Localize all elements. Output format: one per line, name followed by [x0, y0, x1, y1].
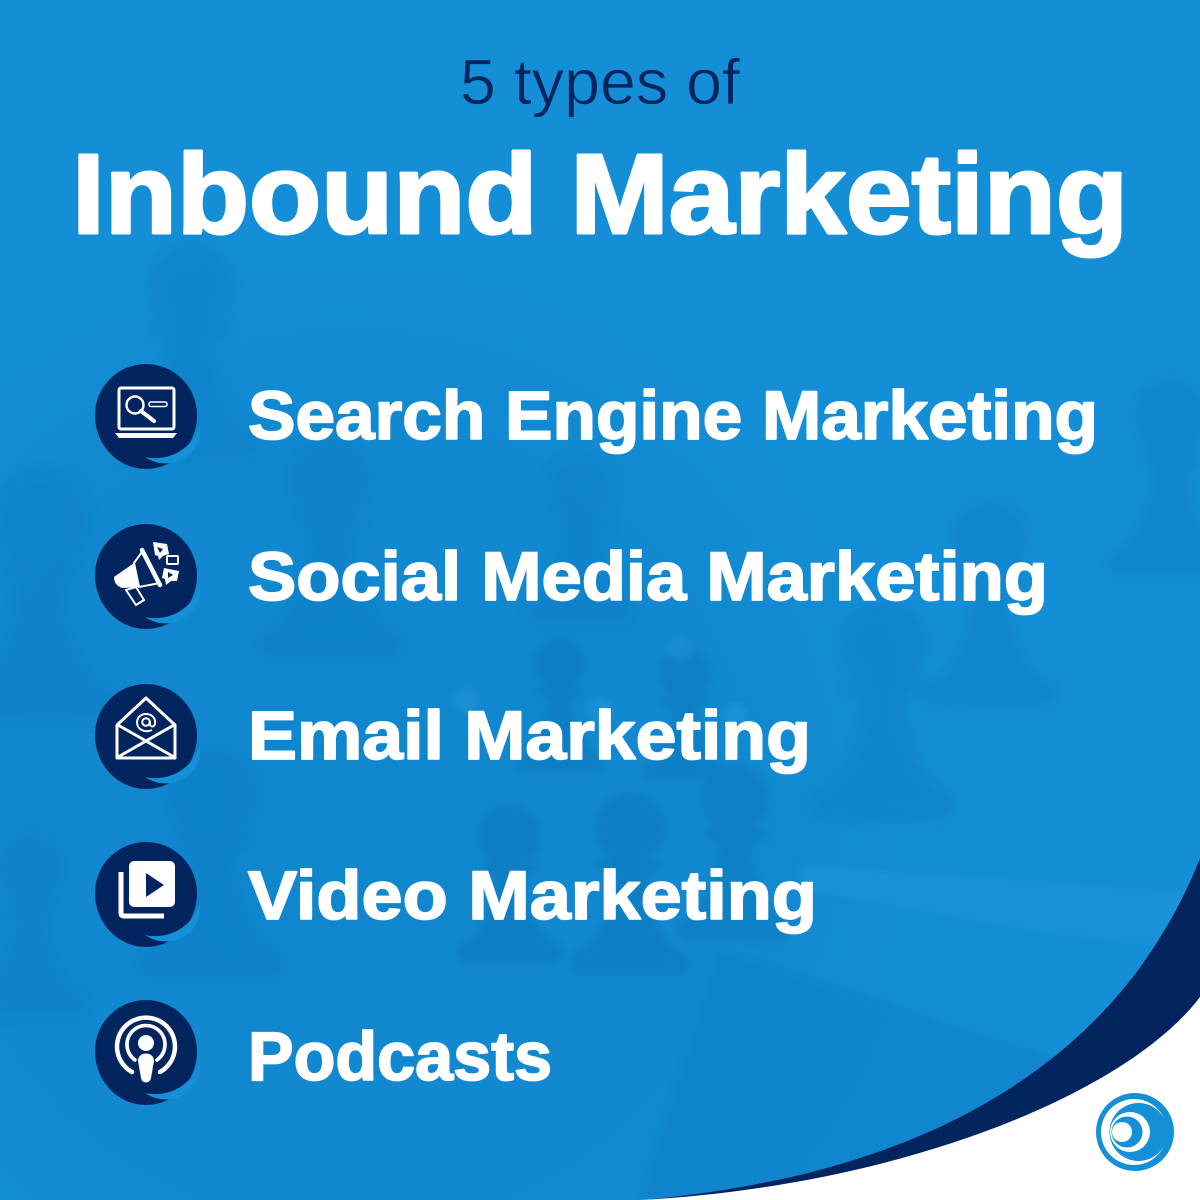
subtitle: 5 types of: [460, 46, 740, 118]
item: Social Media Marketing: [95, 524, 1048, 629]
navy curved corner band: [640, 858, 1200, 1200]
item: Email Marketing: [95, 684, 811, 789]
item: Podcasts: [95, 1000, 552, 1105]
icon: megaphone: [95, 524, 200, 629]
icon: podcast: [95, 1000, 200, 1105]
label: Search Engine Marketing: [248, 377, 1098, 454]
label: Video Marketing: [248, 857, 817, 934]
icon: video playlist: [95, 842, 200, 947]
item: Search Engine Marketing: [95, 364, 1098, 469]
title: Inbound Marketing: [72, 131, 1128, 257]
logo: concentric swirl: [1096, 1093, 1174, 1171]
icon: open envelope: [95, 684, 200, 789]
white corner: [640, 997, 1200, 1200]
label: Podcasts: [248, 1018, 552, 1095]
item: Video Marketing: [95, 842, 817, 947]
label: Email Marketing: [248, 697, 811, 774]
icon: laptop search: [95, 364, 200, 469]
label: Social Media Marketing: [248, 538, 1048, 615]
